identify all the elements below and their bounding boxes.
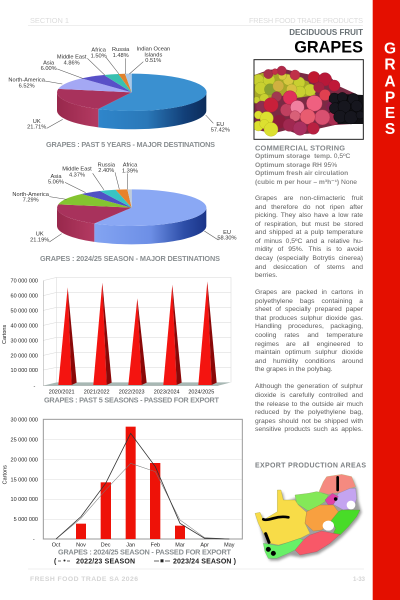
pie 2 labels: UK	[36, 232, 44, 238]
y axis labels: -	[33, 537, 35, 543]
y axis title: Cartons	[3, 465, 9, 484]
Gauteng	[325, 493, 338, 505]
body text: the grapes in the polybag.	[255, 366, 333, 373]
body text: berries.	[255, 272, 278, 279]
body text: dioxide is carefully controlled and	[255, 392, 363, 399]
pie 1 labels: Islands	[144, 52, 162, 58]
storage specifications: Optimum fresh air circulation	[255, 170, 348, 177]
Eastern Cape	[295, 531, 340, 555]
pie 1 labels: 57.42%	[211, 128, 230, 134]
y axis title: Cartons	[2, 325, 8, 344]
Northern Cape	[255, 490, 310, 545]
Free State	[305, 505, 338, 531]
y axis labels: 70 000 000	[11, 279, 38, 285]
x axis labels: 2021/2022	[84, 389, 110, 395]
body text: picking. They also have a low rate	[255, 212, 363, 219]
body text: cooling rates and temperature	[255, 332, 363, 339]
pie 1 labels: Middle East	[57, 55, 87, 61]
caption: monthly: GRAPES : 2024/25 SEASON - PASSED FOR EXPORT	[58, 548, 232, 556]
KwaZulu-Natal	[331, 510, 360, 535]
body text: Although the generation of sulphur	[255, 383, 363, 390]
storing heading: COMMERCIAL STORING	[255, 144, 345, 152]
y axis labels: 50 000 000	[11, 308, 38, 314]
chart legend	[54, 558, 236, 566]
map shadow	[257, 477, 362, 561]
month labels: Dec	[101, 543, 111, 549]
storage specifications: Optimum storage RH 95%	[255, 162, 337, 168]
body text: that produces sulphur dioxide gas.	[255, 315, 363, 322]
x axis labels: 2020/2021	[49, 389, 75, 395]
pie 2 labels: EU	[223, 230, 231, 236]
caption: 2024/25 season destinations: GRAPES : 2024/25 SEASON - MAJOR DESTINATIONS	[40, 254, 220, 263]
y axis labels: 40 000 000	[11, 323, 38, 329]
y axis labels: 25 000 000	[11, 437, 38, 443]
pie 1 labels: 0.51%	[145, 58, 161, 64]
body text	[255, 195, 363, 433]
y axis labels: 30 000 000	[11, 417, 38, 423]
pie 2 labels	[12, 162, 237, 244]
body text: sensitive products such as apples.	[255, 426, 363, 433]
Lesotho	[323, 521, 334, 531]
pie 1 labels: 6.00%	[41, 66, 57, 72]
body text: Grapes are non-climacteric fruit	[255, 195, 363, 202]
body text: polyethylene bags containing a	[255, 298, 363, 305]
pie 2 labels: 2.40%	[98, 168, 114, 174]
pie 1 labels: 21.71%	[27, 125, 46, 131]
pie 2 labels: 1.39%	[122, 168, 138, 174]
chart legend: 2022/23 SEASON	[76, 558, 135, 566]
y axis labels: 10 000 000	[11, 497, 38, 503]
cones	[58, 281, 217, 385]
side tab: R	[384, 56, 396, 74]
body text: the release to the outside air much	[255, 400, 363, 408]
pie 2 labels: 7.29%	[23, 198, 39, 204]
body text: sheet of specially prepared paper	[255, 306, 363, 313]
pie 1 labels: 1.50%	[91, 53, 107, 59]
header left: SECTION 1	[30, 16, 69, 25]
body text: reduced by the polyethylene bag,	[255, 409, 363, 416]
pie 2 labels: North-America	[12, 192, 50, 198]
subheading: DECIDUOUS FRUIT	[289, 28, 363, 37]
pie 2 top face	[57, 189, 206, 226]
x axis labels: 2024/2025	[188, 389, 214, 395]
month labels	[52, 543, 235, 549]
body text: and humidity conditions around	[255, 358, 363, 365]
header right: FRESH FOOD TRADE PRODUCTS	[249, 16, 363, 25]
side tab: G	[384, 40, 396, 58]
pie 1 side faces	[57, 92, 206, 129]
month labels: Apr	[200, 543, 209, 549]
y axis labels: 60 000 000	[11, 294, 38, 300]
pie 1 labels: North-America	[8, 78, 46, 84]
month labels: Jan	[126, 543, 135, 549]
pie 1 labels: EU	[216, 122, 224, 128]
body text: Grapes are packed in cartons in	[255, 289, 363, 296]
pie 2 side faces	[57, 208, 206, 244]
production area markers	[263, 477, 338, 556]
page number: 1-33	[353, 577, 366, 583]
monthly bar and line chart	[3, 417, 242, 549]
pie 1 labels	[8, 47, 230, 134]
Mpumalanga	[333, 488, 357, 510]
month labels: Mar	[175, 543, 185, 549]
grape bunch backing	[254, 68, 363, 134]
month labels: Oct	[52, 543, 61, 549]
pie 2 labels: 58.30%	[217, 236, 237, 242]
black grapes	[329, 92, 364, 124]
body text: and therefore do not ripen after	[255, 204, 363, 211]
body text: of minus 0,5ºC and a relative hu-	[255, 238, 363, 245]
pie 1 labels: 6.52%	[19, 83, 35, 89]
y axis labels: 20 000 000	[11, 457, 38, 463]
side tab: E	[385, 105, 395, 122]
month labels: May	[224, 543, 235, 549]
chart legend: (	[54, 558, 57, 566]
body text: decay (especially Botrytis cinerea)	[255, 255, 363, 262]
body text: of respiration, but must be stored	[255, 221, 363, 228]
footer text: FRESH FOOD TRADE SA 2026	[30, 576, 138, 583]
chart walls and floor	[43, 277, 231, 386]
Limpopo	[319, 474, 356, 494]
pie 2 labels: Russia	[98, 162, 116, 168]
side tab: A	[384, 74, 396, 90]
pie chart: past 5 years	[8, 47, 230, 134]
pie 1 labels: 1.48%	[113, 53, 129, 59]
pie 2 labels: 4.37%	[69, 172, 85, 178]
storage specifications	[255, 153, 357, 186]
pie 2 leader lines	[49, 172, 218, 242]
season lines	[56, 433, 229, 539]
plot frame and gridlines	[43, 419, 242, 539]
North West	[295, 492, 328, 512]
pie 2 labels: Asia	[50, 174, 62, 180]
storage specifications: (cubic m per hour – m³h⁻¹) None	[255, 178, 357, 186]
export areas heading: EXPORT PRODUCTION AREAS	[255, 462, 366, 470]
Western Cape	[263, 538, 303, 558]
pie 1 labels: Indian Ocean	[137, 47, 170, 53]
pie 2 labels: Middle East	[62, 167, 92, 173]
y axis labels: 10 000 000	[11, 368, 38, 374]
pie 2 labels: Africa	[123, 162, 138, 168]
Swaziland	[347, 501, 355, 509]
y axis labels: 15 000 000	[11, 477, 38, 483]
x axis labels	[49, 389, 214, 395]
title: GRAPES	[294, 38, 363, 56]
red and pink grapes	[256, 66, 340, 135]
side tab	[373, 0, 400, 600]
pie 1 labels: 4.86%	[64, 61, 80, 67]
pie 1 labels: Africa	[91, 48, 107, 54]
body text: midity of 95%. This is to avoid	[255, 246, 363, 253]
pie 2 labels: 5.06%	[48, 180, 64, 186]
side tab: P	[385, 90, 395, 106]
body text: maintain optimum sulphur dioxide	[255, 349, 363, 356]
caption: past 5 seasons: GRAPES : PAST 5 SEASONS - PASSED FOR EXPORT	[44, 396, 220, 404]
yellow grapes	[253, 111, 278, 136]
monthly bars	[76, 427, 185, 539]
pie chart: 2024/25 season	[12, 162, 237, 244]
month labels: Nov	[76, 543, 86, 549]
pie 1 labels: Russia	[112, 47, 130, 53]
y axis labels: -	[34, 384, 36, 390]
body text: grapes should not be shipped with	[255, 418, 363, 425]
x axis labels: 2022/2023	[119, 389, 145, 395]
chart legend: 2023/24 SEASON )	[173, 558, 236, 566]
y axis labels: 20 000 000	[11, 353, 38, 359]
caption: past 5 years: GRAPES : PAST 5 YEARS - MAJOR DESTINATIONS	[46, 140, 215, 149]
y axis labels	[11, 417, 38, 543]
side tab: S	[385, 121, 395, 138]
footer line	[28, 568, 364, 570]
yellow-green grapes	[253, 72, 316, 103]
pie 1 top face	[57, 74, 207, 111]
map of South Africa	[255, 474, 362, 561]
grapes photo	[253, 60, 364, 139]
pie 1 leader lines	[45, 57, 213, 128]
y axis labels	[11, 279, 38, 390]
body text: and desiccation of stems and	[255, 264, 363, 270]
storage specifications: Optimum storage temp. 0,5ºC	[255, 153, 350, 160]
body text: Handling procedures, packaging,	[255, 323, 363, 330]
x axis labels: 2023/2024	[154, 389, 180, 395]
pie 2 labels: 21.19%	[30, 238, 49, 244]
month labels: Feb	[151, 543, 160, 549]
pie 1 labels: UK	[33, 119, 41, 125]
pie 1 labels: Asia	[43, 60, 55, 66]
3D cone bar chart: past 5 seasons	[2, 277, 231, 395]
body text: and shipped at a pulp temperature	[255, 229, 363, 236]
body text: regimes are all engineered to	[255, 341, 363, 348]
y axis labels: 30 000 000	[11, 338, 38, 344]
y axis labels: 5 000 000	[14, 517, 38, 523]
